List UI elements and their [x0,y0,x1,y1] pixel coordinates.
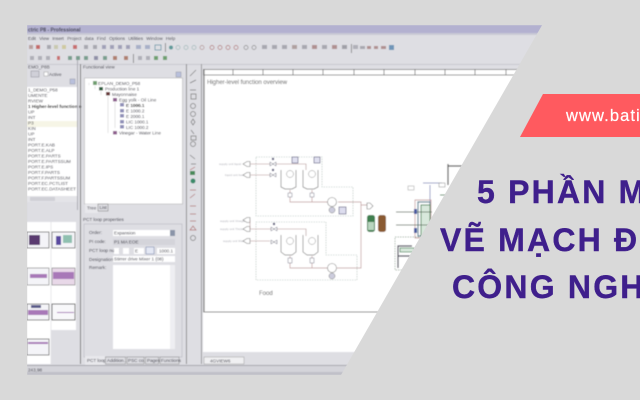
panel: page list [27,60,82,210]
panel: functional view tree: E 1000.2 [126,108,145,114]
panel: functional view tree: Production line 1 [105,86,140,92]
menu bar: Edit View Insert Project data Find Options Utilities Window Help [28,36,176,41]
vertical drawing toolbar [186,64,202,364]
panel: page list: UP [28,132,34,136]
panel: PCT loop properties: PCT loop num: [89,248,120,253]
panel: page list: 1 Higher-level function o [28,104,82,109]
panel: page list: PORT.EC.DATASHEET [28,186,76,192]
website banner: www.bati [565,107,640,125]
sheet tab: 4GVIEW6 [210,358,231,364]
schematic: upper line: supply unit liquid [219,162,242,166]
properties tabs [85,356,182,365]
panel: PCT loop properties: 1000.1 [159,248,173,254]
schematic: lower line: supply unit Vinegar [220,219,245,223]
properties tabs: PCT loop [87,358,107,363]
sheet tab [204,357,244,364]
panel: PCT loop properties: Order: [89,230,102,235]
panel: PCT loop properties: E [135,248,138,254]
tree tabs: List [100,205,107,210]
panel: page list: Active [49,72,62,77]
panel: functional view tree [80,64,182,364]
panel: PCT loop properties: Stirrer drive Mixer 1 (08) [114,256,164,262]
sheet heading: Higher-level function overview [207,80,288,86]
schematic: lower line: Food [259,291,273,297]
panel: page list: PORT.E.KAB [28,142,55,148]
software screenshot [27,25,557,375]
panel: functional view tree: E 2000.1 [126,114,145,119]
panel: PCT loop properties: PI code: [89,239,106,244]
panel: functional view tree: Mayonnaise [112,92,137,97]
drawing sheet [203,69,554,365]
tree tabs [85,204,108,213]
panel: page list: PORT.EC.PCTLIST [28,181,68,186]
diagonal grey overlay [318,20,640,400]
panel: functional view tree: E 1000.1 [126,103,145,108]
panel: page list: PORT.E.ALP [28,148,54,153]
title [440,174,640,305]
panel: functional view tree: LIC 1000.2 [126,125,149,130]
schematic: upper line [219,157,373,216]
panel: page list: UMENTE [28,93,47,98]
properties tabs: PSC co... [128,358,147,363]
panel: page list: PORT.F.PARTSSUM [28,176,70,180]
title: VẼ MẠCH Đ [440,222,639,258]
panel: page list: PORT.E.PARTSSUM [28,159,71,164]
panel: PCT loop properties: Designation: [89,257,115,262]
panel: functional view tree: Functional view [83,64,115,70]
properties tabs: Pages [147,358,161,363]
toolbar icons [29,43,394,63]
schematic: right section [395,164,462,270]
panel: functional view tree: EPLAN_DEMO_P58 [98,81,141,86]
panel: functional view tree: LIC 1000.1 [126,120,149,124]
panel: functional view tree: Egg yolk - Oil Line [119,98,157,102]
schematic: lower line [220,205,361,297]
status bar [27,365,557,375]
title bar: ctric P8 - Professional [28,28,81,34]
panel: page list: KIN [28,126,36,131]
title bar [27,25,557,35]
panel: PCT loop properties: Expansion [114,230,136,236]
schematic: lower line: supply unit Thickener [220,227,248,231]
schematic: lower line: supply unit Water [223,239,246,243]
panel: PCT loop properties [83,217,182,357]
panel: PCT loop properties: PCT loop properties [83,217,124,222]
schematic: vessels [367,215,386,232]
website banner [520,94,640,137]
panel: page list: INT [28,115,36,120]
panel: page list: PORT.E.PARTS [28,154,61,158]
panel: page list: INT [28,137,36,142]
properties tabs: Addition... [107,358,127,363]
panel: page list: 1_DEMO_P58 [28,88,58,92]
tree tabs: Tree [87,206,97,210]
schematic: upper line: liquid unit feed [225,173,245,177]
panel: page list: PORT.F.PARTS [28,170,60,175]
panel: page list: EMO_P8B [28,64,50,70]
panel: page list: UP [28,110,34,114]
panel: PCT loop properties: P1 MA EOE [114,240,139,244]
panel: functional view tree: Vinegar - Water Line [119,130,161,136]
title: CÔNG NGH [452,269,640,305]
panel: page list: PORT.E.IPS [28,164,53,170]
panel: page list: RVIEW [28,98,44,104]
panel: page thumbnails [27,222,77,365]
panel: page list: P3 [28,120,34,126]
properties tabs: Functions [161,358,182,363]
status bar: 243,98 [28,368,42,372]
panel: PCT loop properties: Remark: [89,265,106,270]
